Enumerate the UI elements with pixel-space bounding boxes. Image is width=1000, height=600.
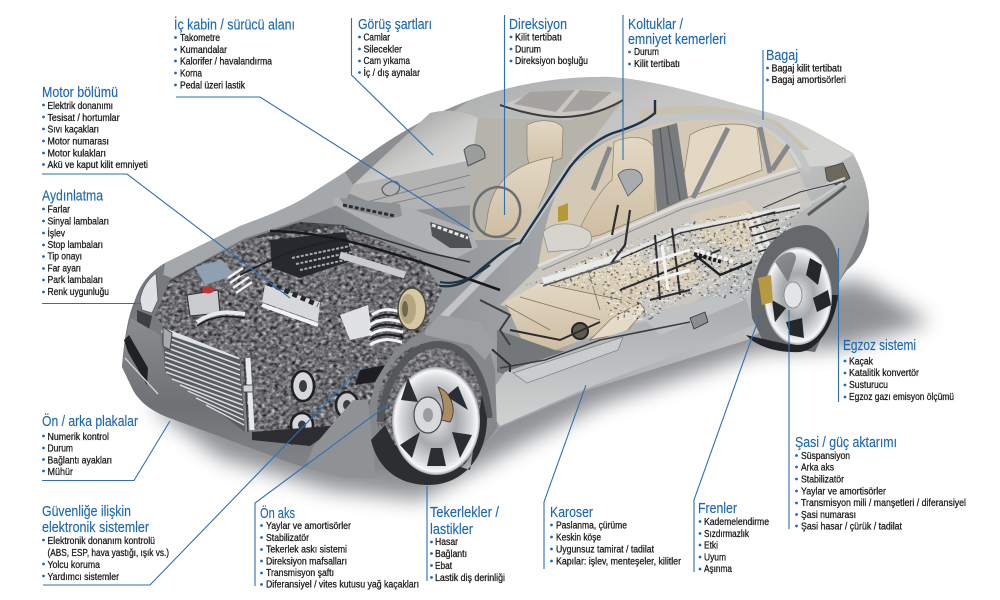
panel: motor bölümü: Akü ve kaput kilit emniyeti	[48, 160, 148, 171]
seat belts and c pillar	[593, 127, 790, 198]
dark a pillar hose	[435, 100, 655, 286]
panel: karoser: Uygunsuz tamirat / tadilat	[556, 545, 654, 556]
panel: ön / arka plakalar: Numerik kontrol	[48, 432, 109, 443]
engine bay	[150, 215, 500, 450]
panel: motor bölümü: Motor bölümü	[42, 85, 118, 101]
front fender	[348, 322, 497, 470]
panel: motor bölümü: Motor numarası	[48, 136, 109, 148]
panel: direksiyon: Direksiyon boşluğu	[515, 56, 588, 67]
car cutaway illustration	[122, 77, 930, 500]
panel: güvenliğe ilişkin elektronik sistemler: Elektronik donanım kontrolü	[48, 536, 155, 547]
panel: ön aks: Diferansiyel / vites kutusu yağ kaçakları	[266, 580, 419, 591]
underfloor strip	[487, 290, 745, 383]
panel: tekerlekler / lastikler: Lastik diş derinliği	[435, 573, 505, 584]
panel: iç kabin / sürücü alanı: Pedal üzeri lastik	[180, 80, 245, 91]
panel: görüş şartları	[352, 17, 433, 155]
floor carpet	[497, 330, 570, 376]
panel: egzoz sistemi: Egzoz gazı emisyon ölçümü	[849, 392, 954, 403]
rear mechanical detail	[526, 208, 799, 320]
roof lining strip	[640, 106, 810, 150]
panel: şasi / güç aktarımı: Şasi / güç aktarımı	[795, 435, 897, 451]
panel: motor bölümü: Motor kulakları	[48, 148, 106, 159]
far side seats	[484, 121, 563, 240]
panel: aydınlatma	[42, 188, 140, 304]
panel: frenler	[694, 315, 769, 575]
panel: motor bölümü: Tesisat / hortumlar	[48, 113, 120, 124]
panel: egzoz sistemi: Egzoz sistemi	[843, 338, 916, 354]
panel: tekerlekler / lastikler: Ebat	[435, 561, 452, 572]
panel: ön aks: Direksiyon mafsalları	[266, 556, 347, 568]
panel: iç kabin / sürücü alanı: İç kabin / sürücü alanı	[174, 16, 295, 34]
near window interior	[538, 118, 797, 268]
rear wheel arch	[751, 225, 839, 352]
panel: iç kabin / sürücü alanı: Kumandalar	[180, 45, 228, 56]
panel: koltuklar / emniyet kemerleri: Koltuklar /	[628, 17, 684, 33]
panel: koltuklar / emniyet kemerleri: emniyet kemerleri	[628, 32, 726, 48]
panel: direksiyon	[504, 15, 588, 215]
panel: ön / arka plakalar: Durum	[48, 444, 73, 455]
panel: tekerlekler / lastikler: lastikler	[430, 522, 473, 538]
door mirror far side	[464, 145, 485, 166]
panel: aydınlatma: Renk uygunluğu	[48, 287, 109, 298]
panel: egzoz sistemi: Katalitik konvertör	[849, 368, 920, 379]
lower door translucent panel	[500, 168, 812, 332]
panel: bagaj: Bagaj amortisörleri	[772, 75, 846, 86]
panel: tekerlekler / lastikler: Bağlantı	[435, 549, 467, 560]
panel: güvenliğe ilişkin elektronik sistemler	[42, 368, 360, 585]
front wheel arch interior	[377, 344, 482, 468]
panel: egzoz sistemi	[838, 248, 954, 403]
panel: şasi / güç aktarımı: Yaylar ve amortisörler	[801, 486, 887, 497]
panel: görüş şartları: Silecekler	[364, 44, 403, 55]
panel: ön aks: Tekerlek askı sistemi	[266, 545, 347, 556]
panel: frenler: Etki	[704, 540, 718, 552]
panel: bagaj: Bagaj	[766, 48, 798, 64]
panel: güvenliğe ilişkin elektronik sistemler: Yardımcı sistemler	[48, 572, 120, 583]
panel: direksiyon: Direksiyon	[509, 17, 567, 33]
panel: egzoz sistemi: Susturucu	[849, 380, 888, 391]
panel: karoser: Paslanma, çürüme	[556, 521, 627, 532]
panel: ön / arka plakalar	[42, 412, 170, 480]
panel: şasi / güç aktarımı: Süspansiyon	[801, 451, 850, 462]
rear seat back	[680, 124, 793, 200]
panel: ön aks: Ön aks	[260, 504, 295, 522]
rear quarter panel	[735, 155, 869, 285]
rear light housing	[808, 163, 850, 215]
panel: frenler: Kademelendirme	[704, 517, 769, 528]
panel: karoser	[544, 385, 682, 569]
ground shadow	[150, 280, 930, 500]
panel: ön / arka plakalar: Bağlantı ayakları	[48, 456, 112, 466]
steering wheel	[468, 182, 526, 242]
panel: aydınlatma: Far ayarı	[48, 264, 81, 274]
panel: şasi / güç aktarımı: Stabilizatör	[801, 474, 845, 486]
rear seat cushion through door	[640, 200, 760, 300]
panel: aydınlatma: Aydınlatma	[42, 188, 104, 204]
panel: aydınlatma: Farlar	[48, 205, 71, 216]
far side cabin view	[470, 100, 623, 240]
panel: bagaj	[763, 48, 846, 120]
panel: direksiyon: Durum	[515, 44, 541, 55]
panel: aydınlatma: Stop lambaları	[48, 240, 103, 251]
radiator	[162, 327, 245, 432]
panel: iç kabin / sürücü alanı	[174, 16, 473, 232]
front wheel arch band	[380, 344, 489, 422]
rocker sill	[484, 296, 755, 426]
panel: ön aks: Stabilizatör	[266, 533, 310, 544]
panel: tekerlekler / lastikler: Tekerlekler /	[430, 505, 500, 521]
front bumper	[122, 318, 367, 477]
panel: şasi / güç aktarımı: Transmisyon mili / manşetleri / diferansiyel	[801, 498, 966, 509]
panel: güvenliğe ilişkin elektronik sistemler: Yolcu koruma	[48, 560, 101, 571]
panel: egzoz sistemi: Kaçak	[849, 356, 873, 368]
panel: koltuklar / emniyet kemerleri: Kilit tertibatı	[634, 59, 680, 70]
panel: şasi / güç aktarımı: Arka aks	[801, 463, 834, 474]
panel: karoser: Kapılar: işlev, menteşeler, kilitler	[556, 556, 682, 568]
door mirror near side	[543, 224, 591, 252]
panel: bagaj: Bagaj kilit tertibatı	[772, 63, 842, 74]
panel: şasi / güç aktarımı	[789, 310, 966, 532]
panel: güvenliğe ilişkin elektronik sistemler: Güvenliğe ilişkin	[42, 504, 131, 520]
sunroof	[500, 90, 623, 118]
panel: aydınlatma: Sinyal lambaları	[48, 216, 109, 228]
headlight	[137, 273, 158, 335]
panel: ön / arka plakalar: Mühür	[48, 467, 74, 478]
rear rim	[758, 247, 832, 345]
panel: görüş şartları: Cam yıkama	[364, 56, 411, 67]
panel: görüş şartları: Görüş şartları	[358, 17, 432, 33]
panel: motor bölümü: Elektrik donanımı	[48, 101, 113, 112]
panel: ön aks	[255, 403, 419, 591]
panel: tekerlekler / lastikler: Hasar	[435, 537, 459, 548]
panel: ön / arka plakalar: Ön / arka plakalar	[42, 412, 138, 430]
panel: şasi / güç aktarımı: Şasi numarası	[801, 510, 856, 521]
panel: iç kabin / sürücü alanı: Kalorifer / havalandırma	[180, 57, 273, 68]
panel: güvenliğe ilişkin elektronik sistemler: elektronik sistemler	[42, 520, 149, 536]
driver seat back	[575, 137, 655, 240]
front rim	[392, 367, 480, 475]
front lower translucent panel	[305, 400, 376, 478]
panel: frenler: Sızdırmazlık	[704, 529, 749, 540]
panel: güvenliğe ilişkin elektronik sistemler: (ABS, ESP, hava yastığı, ışık vs.)	[48, 548, 169, 559]
panel: görüş şartları: İç / dış aynalar	[364, 68, 421, 79]
panel: motor bölümü	[42, 85, 290, 298]
panel: tekerlekler / lastikler	[427, 486, 505, 584]
roof	[430, 77, 853, 175]
front tire	[371, 395, 487, 485]
rear chassis mechanics	[480, 169, 845, 345]
panel: aydınlatma: Park lambaları	[48, 275, 103, 286]
a pillar silver	[440, 116, 808, 320]
panel: frenler: Aşınma	[704, 564, 733, 575]
panel: şasi / güç aktarımı: Şasi hasar / çürük / tadilat	[801, 522, 902, 532]
panel: iç kabin / sürücü alanı: Takometre	[180, 33, 220, 44]
panel: frenler: Uyum	[704, 552, 726, 563]
front fender nose	[130, 272, 172, 375]
panel: aydınlatma: Tip onayı	[48, 252, 82, 263]
hood frame	[160, 172, 353, 300]
panel: koltuklar / emniyet kemerleri	[623, 15, 726, 160]
b pillar	[652, 123, 688, 212]
car body silhouette	[122, 77, 869, 478]
panel: direksiyon: Kilit tertibatı	[515, 32, 562, 44]
panel: motor bölümü: Sıvı kaçakları	[48, 125, 99, 136]
panel: görüş şartları: Camlar	[364, 32, 391, 44]
rear tire	[746, 295, 838, 352]
panel: aydınlatma: İşlev	[48, 228, 65, 239]
panel: karoser: Karoser	[550, 505, 593, 521]
panel: koltuklar / emniyet kemerleri: Durum	[634, 47, 659, 58]
windshield and far door window	[353, 111, 478, 185]
panel: iç kabin / sürücü alanı: Korna	[180, 68, 203, 80]
panel: frenler: Frenler	[698, 501, 737, 517]
bumper air intake	[124, 335, 148, 385]
panel: karoser: Keskin köşe	[556, 533, 601, 544]
panel: ön aks: Yaylar ve amortisörler	[266, 521, 352, 532]
dashboard	[333, 197, 490, 283]
panel: ön aks: Transmisyon şaftı	[266, 568, 334, 579]
front fender edge	[425, 315, 495, 360]
near front seat	[505, 252, 645, 352]
